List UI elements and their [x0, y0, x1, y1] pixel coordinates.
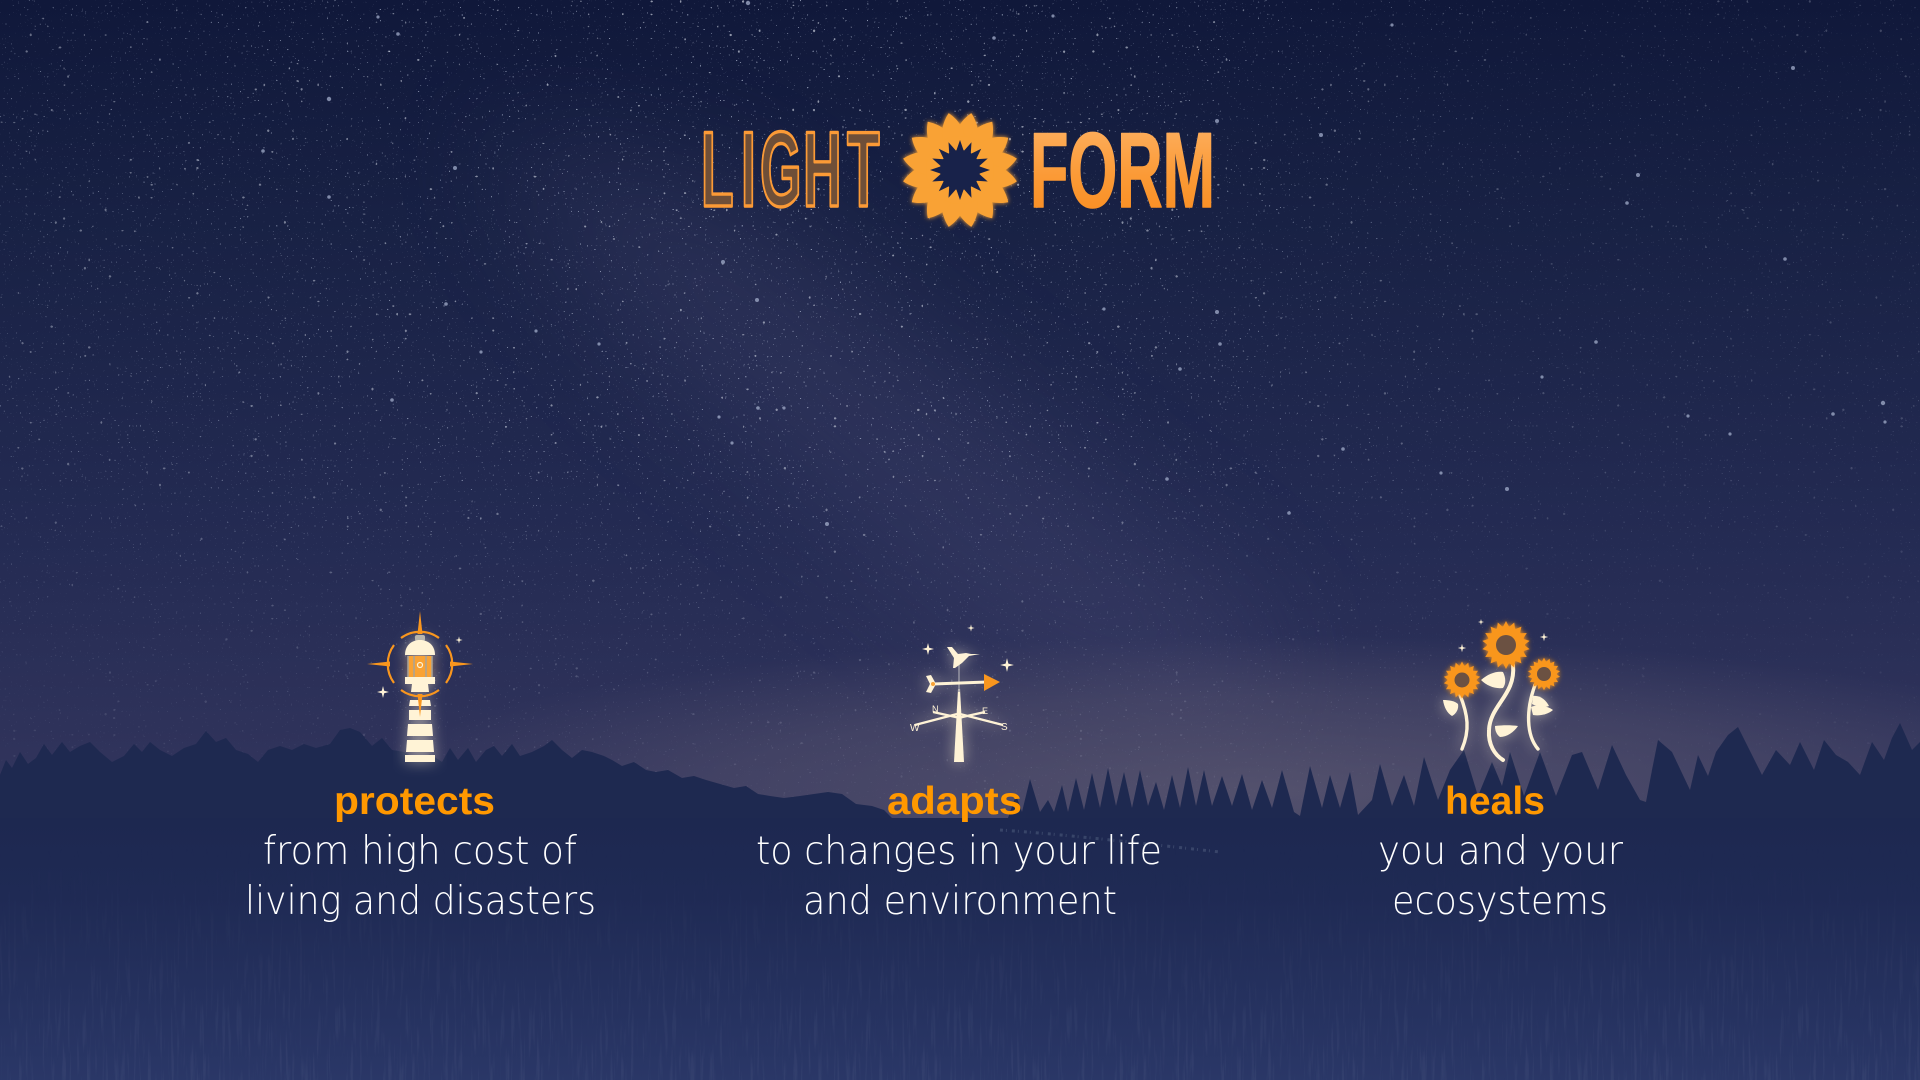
icon: sunflowers	[1443, 619, 1561, 760]
text block: heals	[1378, 780, 1623, 924]
text block: heals: you and your	[1378, 829, 1623, 874]
icon: weathervane: E	[982, 706, 988, 716]
logo word: LIGHT: LIGHT	[701, 109, 880, 229]
text block: adapts: and environment	[803, 879, 1117, 924]
text block: protects: from high cost of	[263, 829, 577, 874]
logo	[701, 109, 1215, 230]
text block: adapts: to changes in your life	[756, 829, 1162, 874]
icon: weathervane: W	[910, 723, 920, 734]
text block: protects: living and disasters	[245, 879, 596, 924]
icon: lighthouse	[367, 611, 473, 762]
text block: adapts: adapts	[887, 780, 1022, 823]
icon: weathervane: S	[1001, 722, 1008, 733]
text block: protects	[245, 780, 596, 924]
text block: heals: heals	[1445, 780, 1545, 823]
text block: adapts	[756, 780, 1162, 924]
background: tree line and meadow	[0, 723, 1920, 1080]
logo word: FORM: FORM	[1030, 110, 1215, 230]
background: night sky	[0, 0, 1920, 818]
text block: protects: protects	[334, 780, 495, 823]
icon: weathervane: N	[932, 704, 938, 714]
icon: weathervane	[910, 624, 1014, 762]
text block: heals: ecosystems	[1392, 879, 1608, 924]
logo icon: sunflower	[901, 111, 1019, 229]
